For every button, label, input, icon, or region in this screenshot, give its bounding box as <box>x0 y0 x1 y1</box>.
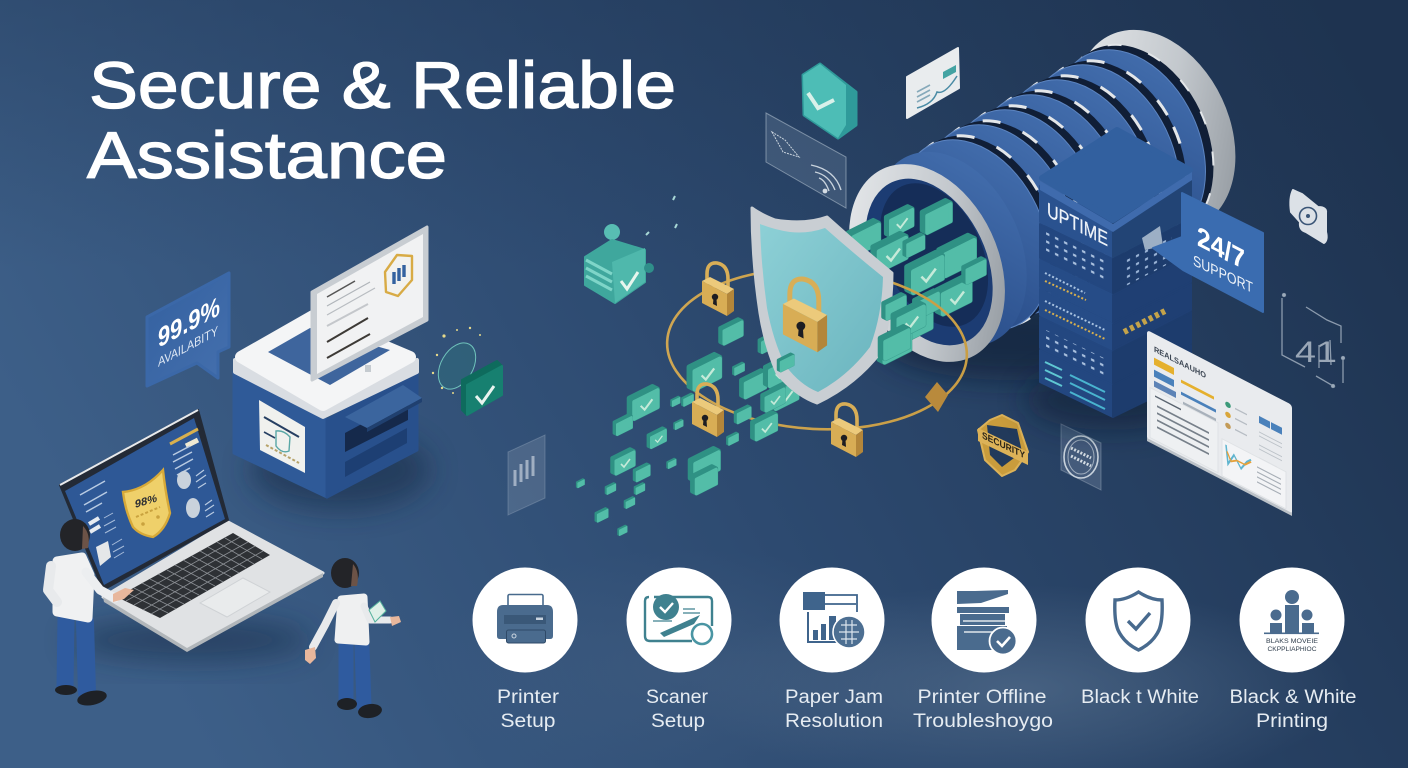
label: Setup <box>651 711 705 732</box>
icon: padlock lower left <box>692 384 724 437</box>
server tower <box>1025 130 1195 430</box>
tower indicators <box>1045 232 1172 409</box>
label: Black t White <box>1081 687 1199 708</box>
title <box>87 48 676 192</box>
label: Resolution <box>785 711 883 732</box>
printer illustration <box>234 227 430 510</box>
dashboard panel: REALSAAUHO <box>1154 344 1206 381</box>
label: Troubleshoygo <box>913 711 1053 732</box>
icon: folder chart globe <box>803 592 865 648</box>
label: Printing <box>1256 711 1328 732</box>
label <box>646 687 709 732</box>
label <box>785 687 883 732</box>
icon: teal server block <box>585 196 677 303</box>
laptop shield: 98% <box>135 493 157 511</box>
callout: 99.9% availability: AVAILABITY <box>158 322 218 370</box>
label: Setup <box>500 711 556 732</box>
dashboard panel <box>1147 330 1292 516</box>
person at laptop <box>48 519 134 708</box>
icon: padlock upper left <box>702 263 734 316</box>
callout: 99.9% availability <box>147 273 229 386</box>
label: Printer <box>497 687 560 708</box>
callout: 24/7 support <box>1153 193 1263 312</box>
service: black and white <box>1081 568 1199 708</box>
service: scanner setup <box>626 568 732 732</box>
label: Black & White <box>1230 687 1356 708</box>
data tiles in front of shield <box>762 294 924 411</box>
label: Printer Offline <box>918 687 1046 708</box>
security badge: SECURITY <box>982 430 1025 462</box>
laptop shield <box>123 470 170 537</box>
icon: printer <box>497 594 553 643</box>
icon: teal check tile <box>803 64 856 138</box>
data tiles entering the cylinder <box>848 200 985 362</box>
server cylinder <box>819 4 1266 387</box>
laptop screen <box>65 418 225 585</box>
monitor <box>312 227 427 380</box>
service: black and white printing <box>1230 568 1356 732</box>
icon: white gear badge <box>1290 190 1327 243</box>
icon: shield check <box>1115 592 1162 650</box>
security badge <box>978 415 1028 476</box>
printed sheet <box>259 400 305 473</box>
icon: people group <box>1264 590 1319 653</box>
icon: white chart card <box>907 48 959 118</box>
shield with padlock <box>752 208 892 403</box>
label: Scaner <box>646 687 709 708</box>
icon: faded chart card <box>508 435 545 515</box>
service: printer setup <box>472 568 578 732</box>
title: Assistance <box>87 118 447 192</box>
title: Secure & Reliable <box>89 48 676 122</box>
callout: 24/7 support: 24/7 <box>1197 221 1245 277</box>
icon: padlock bottom <box>831 404 863 457</box>
icon: copier with check <box>957 590 1016 654</box>
label <box>1230 687 1356 732</box>
label <box>913 687 1053 732</box>
label <box>497 687 560 732</box>
laptop <box>60 410 323 662</box>
label: Paper Jam <box>785 687 883 708</box>
uptime label: UPTIME <box>1047 199 1108 251</box>
gold security ring <box>663 261 971 437</box>
icon: circuit frame with number: 41 <box>1295 336 1337 369</box>
icon: circuit frame with number <box>1282 294 1344 388</box>
service: paper jam resolution <box>780 568 884 732</box>
icon: green check badge <box>431 327 502 415</box>
icon: glass wifi card <box>766 113 846 208</box>
scattered data tiles <box>576 319 807 535</box>
icon: scanner <box>645 594 712 644</box>
callout: 99.9% availability: 99.9% <box>158 291 220 355</box>
service: printer offline troubleshooting <box>913 568 1053 732</box>
icon: people group: BLAKS MOVEIE <box>1266 638 1319 645</box>
icon: padlock on shield <box>783 279 827 352</box>
callout: 24/7 support: SUPPORT <box>1193 253 1253 297</box>
glass seal card <box>1061 424 1101 490</box>
person with phone <box>305 558 401 720</box>
icon: people group: CKPPLIAPHIOC <box>1268 646 1317 653</box>
